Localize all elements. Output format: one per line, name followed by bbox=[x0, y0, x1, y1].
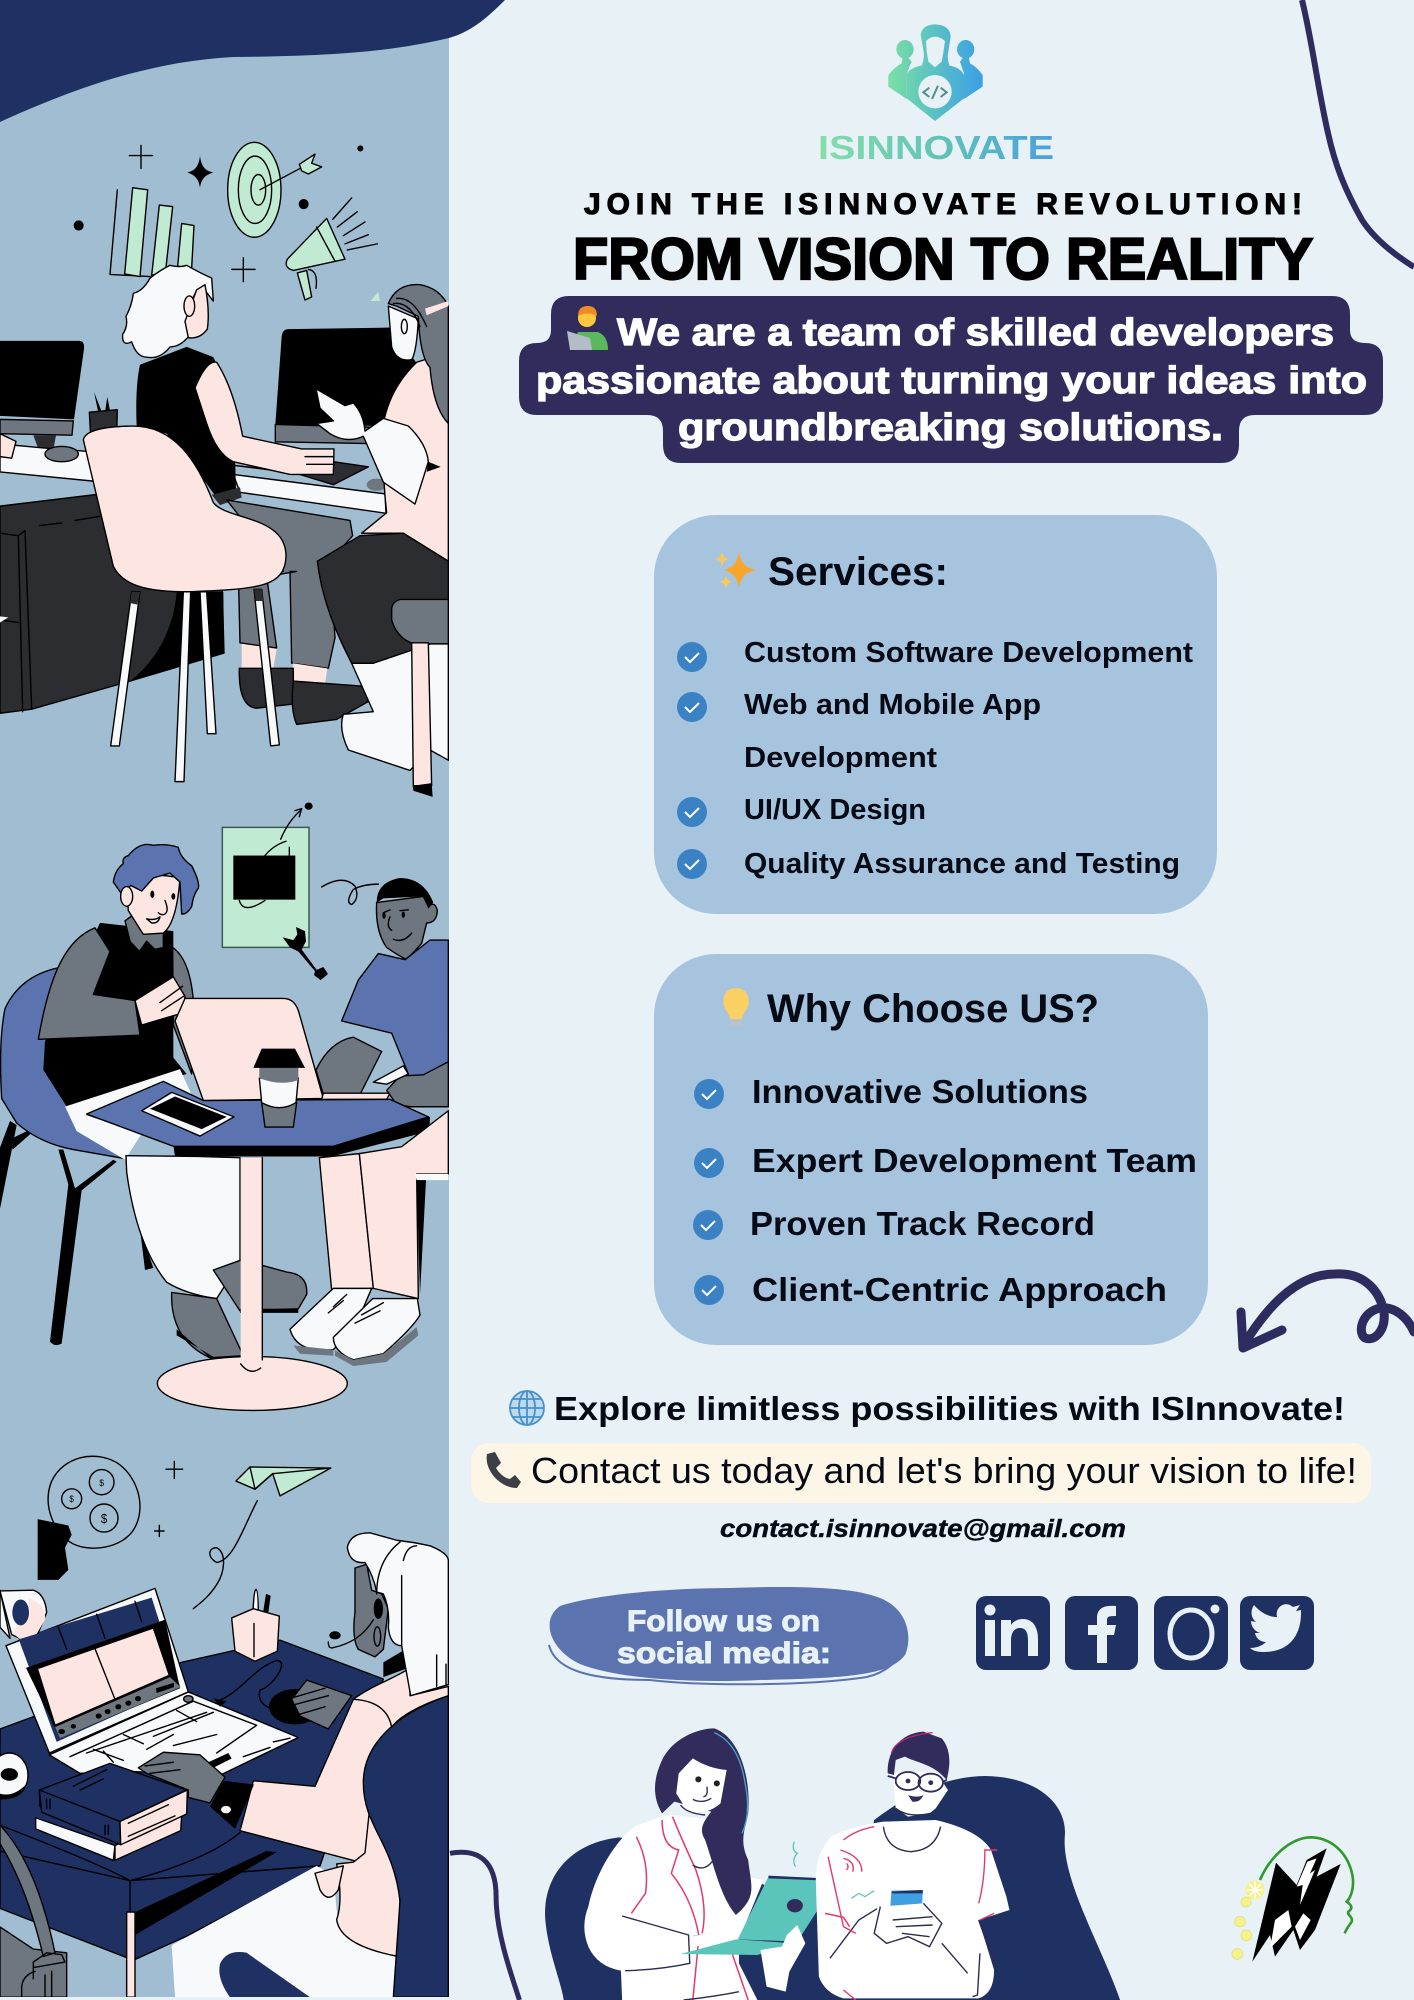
paper plane bbox=[236, 1467, 331, 1496]
lamp bbox=[0, 1590, 10, 1638]
icons: check marks bbox=[693, 1079, 724, 1305]
logo mark: three developers shield bbox=[888, 24, 983, 121]
scene: two colleagues at a cafe table bbox=[0, 802, 448, 1410]
list: services: Development bbox=[744, 742, 937, 774]
heading: services: Services: bbox=[768, 550, 948, 594]
callout: team description bbox=[519, 296, 1383, 463]
shoulder bag bbox=[0, 1927, 67, 1997]
arrow: curved pointing down left bbox=[1241, 1274, 1414, 1348]
torso and chair bbox=[172, 1866, 398, 1997]
panel: services bbox=[654, 515, 1217, 914]
chair legs bbox=[0, 1121, 117, 1345]
panel: why choose us bbox=[654, 954, 1208, 1345]
icons: social media bbox=[976, 1596, 1314, 1670]
list: services: Custom Software Development bbox=[744, 637, 1193, 669]
man bbox=[816, 1732, 1009, 2000]
list: reasons: Proven Track Record bbox=[750, 1205, 1095, 1242]
woman bbox=[584, 1728, 764, 2000]
man in vest bbox=[43, 923, 187, 1107]
laptop bbox=[681, 1876, 839, 1992]
list: services: Web and Mobile App bbox=[744, 689, 1041, 721]
callout: follow us: social media: bbox=[617, 1637, 831, 1670]
text: line three: groundbreaking solutions. bbox=[678, 407, 1223, 449]
text: line one: We are a team of skilled developers bbox=[617, 312, 1334, 354]
icon: sparkles bbox=[715, 552, 757, 588]
hair and head bbox=[123, 265, 213, 358]
icon: technologist emoji bbox=[567, 306, 608, 350]
left monitor bbox=[0, 341, 84, 419]
second person bbox=[362, 352, 448, 561]
desk bbox=[0, 1640, 383, 1881]
wall poster bbox=[222, 827, 309, 947]
text: email: contact.isinnovate@gmail.com bbox=[720, 1515, 1126, 1543]
right monitor bbox=[275, 328, 417, 426]
list: services bbox=[744, 637, 1193, 880]
list: reasons bbox=[750, 1073, 1197, 1308]
scene: person working on laptop bbox=[0, 1456, 448, 1997]
top navy wave bbox=[0, 0, 505, 122]
icon: linkedin bbox=[976, 1596, 1050, 1670]
text: explore possibilities: Explore limitless possibilities with ISInnovate! bbox=[554, 1390, 1345, 1427]
thought bubble bbox=[48, 1456, 140, 1548]
cable and mouse bbox=[217, 1660, 282, 1708]
decorative curve: top right bbox=[1302, 0, 1414, 267]
title: from vision to reality: FROM VISION TO REALITY bbox=[573, 227, 1313, 292]
logo: lightning emblem bbox=[1232, 1837, 1353, 1962]
callout: contact: Contact us today and let's bring your vision to life! bbox=[531, 1450, 1357, 1491]
disc bbox=[0, 1753, 28, 1797]
illustration: two people with devices bbox=[450, 1728, 1120, 2000]
heading: why choose us: Why Choose US? bbox=[767, 987, 1099, 1031]
list: reasons: Client-Centric Approach bbox=[752, 1271, 1167, 1308]
books bbox=[36, 1818, 115, 1860]
scene: team working at desks bbox=[0, 142, 448, 797]
laptop bbox=[6, 1588, 188, 1753]
icons: check marks bbox=[677, 642, 707, 879]
callout: contact bbox=[471, 1443, 1371, 1503]
chair blue bbox=[1, 968, 127, 1159]
icon: globe bbox=[510, 1391, 544, 1425]
hand and arm bbox=[240, 1698, 393, 1862]
scene: person working on laptop: $ bbox=[99, 1477, 104, 1488]
icon: facebook bbox=[1065, 1596, 1138, 1670]
decorative curve: bottom left bbox=[450, 1852, 519, 2000]
logo: ISInnovate bbox=[818, 24, 1054, 166]
icon: twitter bbox=[1240, 1596, 1314, 1670]
coffee cup bbox=[262, 1103, 297, 1127]
logo wordmark: ISINNOVATE bbox=[818, 129, 1054, 166]
list: reasons: Innovative Solutions bbox=[752, 1073, 1088, 1110]
text: line two: passionate about turning your ideas into bbox=[536, 360, 1367, 402]
icon: instagram bbox=[1154, 1596, 1228, 1670]
right man bbox=[376, 896, 437, 960]
list: reasons: Expert Development Team bbox=[752, 1142, 1197, 1179]
woman with curly hair: torso bbox=[136, 347, 236, 503]
head with headset bbox=[354, 1564, 388, 1657]
table bbox=[86, 1115, 430, 1156]
list: services: Quality Assurance and Testing bbox=[744, 848, 1180, 880]
panel: left illustration column bbox=[0, 0, 449, 1997]
scene: person working on laptop: $ bbox=[101, 1511, 107, 1526]
pen holder bbox=[94, 392, 110, 411]
heading: join the revolution: JOIN THE ISINNOVATE REVOLUTION! bbox=[584, 188, 1302, 221]
chair bbox=[83, 426, 286, 592]
icon: light bulb bbox=[723, 988, 749, 1026]
cabinet bbox=[0, 494, 224, 713]
callout: follow us bbox=[549, 1587, 908, 1684]
trousers bbox=[227, 500, 353, 668]
list: services: UI/UX Design bbox=[744, 794, 926, 826]
legs bbox=[126, 1156, 240, 1299]
table pedestal bbox=[157, 1357, 347, 1410]
pencil cup bbox=[252, 1588, 259, 1610]
scene: person working on laptop: $ bbox=[69, 1494, 74, 1504]
blue blobs bbox=[545, 1837, 843, 2000]
laptop lid bbox=[175, 998, 323, 1101]
megaphone bbox=[286, 218, 345, 270]
callout: follow us: Follow us on bbox=[627, 1605, 820, 1638]
icon: phone bbox=[487, 1452, 521, 1488]
